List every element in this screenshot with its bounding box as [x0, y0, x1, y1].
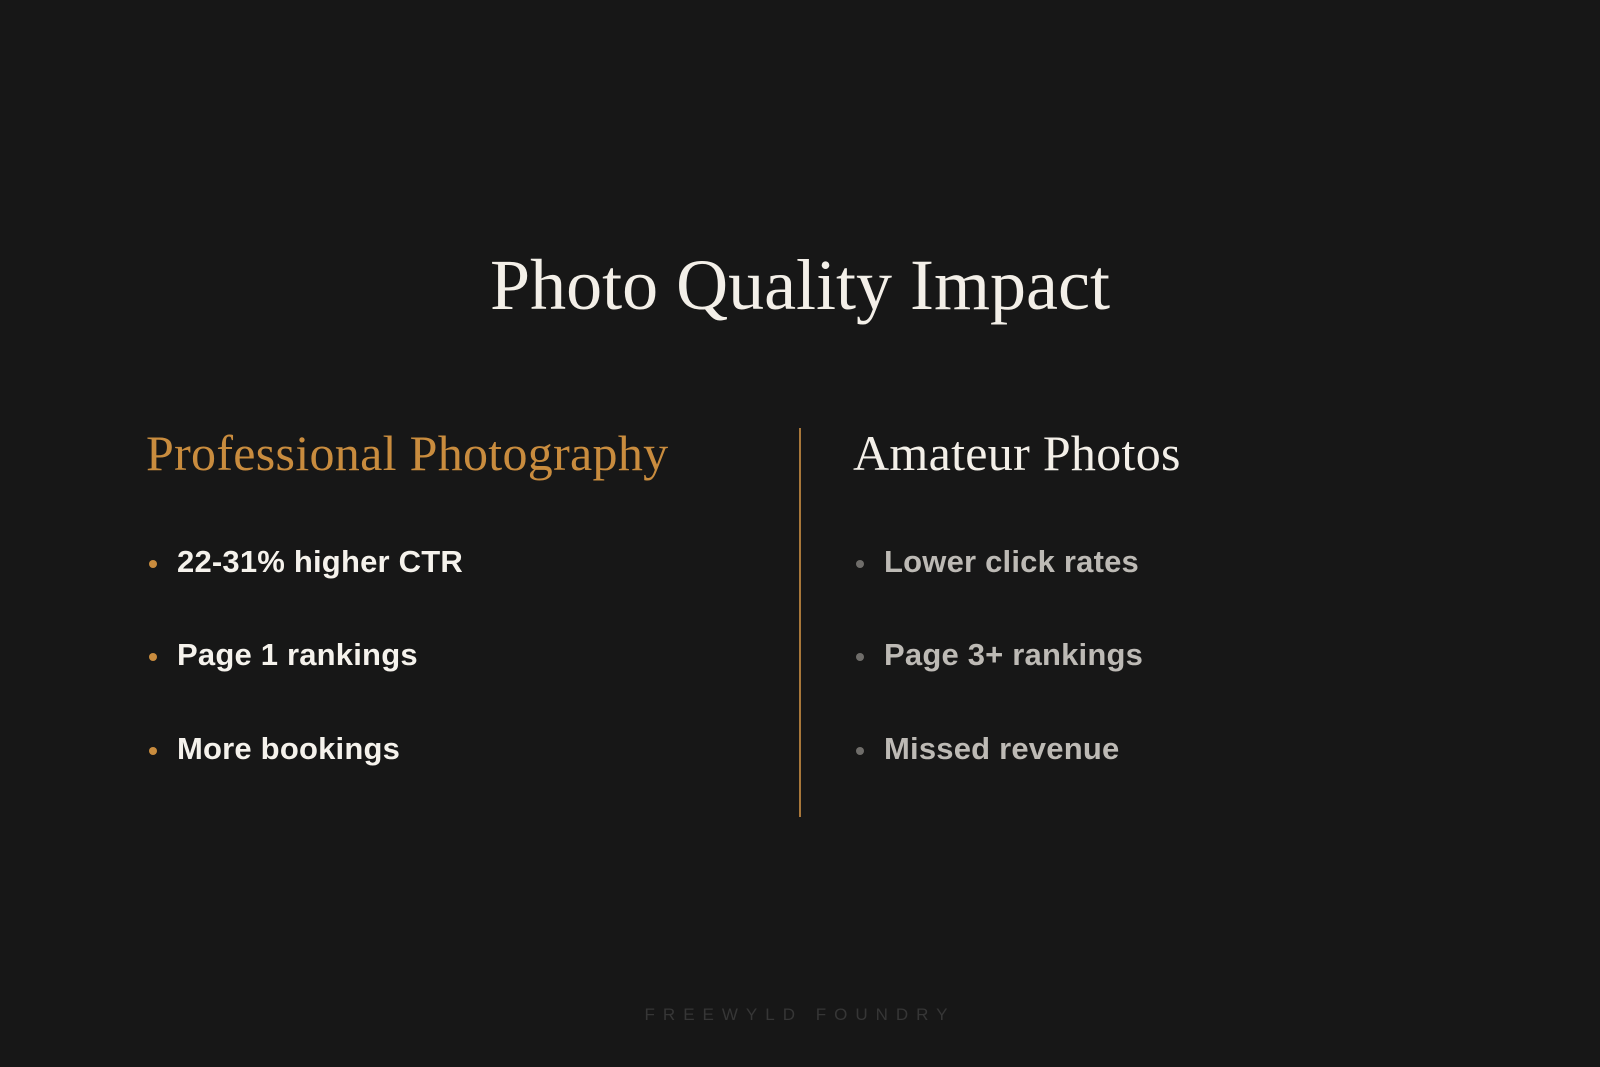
bullet: click rates: Lower click rates: [884, 544, 1139, 579]
panel: amateur: [853, 425, 1181, 766]
bullet: rankings: Page 1 rankings: [177, 637, 418, 672]
title: Photo Quality Impact: [490, 245, 1110, 325]
bullet: rankings: Page 3+ rankings: [884, 637, 1143, 672]
footer: FREEWYLD FOUNDRY: [645, 1005, 955, 1024]
panel: professional: [146, 425, 668, 766]
bullet: ctr: 22-31% higher CTR: [177, 544, 463, 579]
heading: amateur photos: Amateur Photos: [853, 425, 1181, 481]
divider: [799, 428, 801, 817]
heading: professional photography: Professional Photography: [146, 425, 668, 481]
bullet: bookings: More bookings: [177, 731, 400, 766]
bullet: revenue: Missed revenue: [884, 731, 1119, 766]
